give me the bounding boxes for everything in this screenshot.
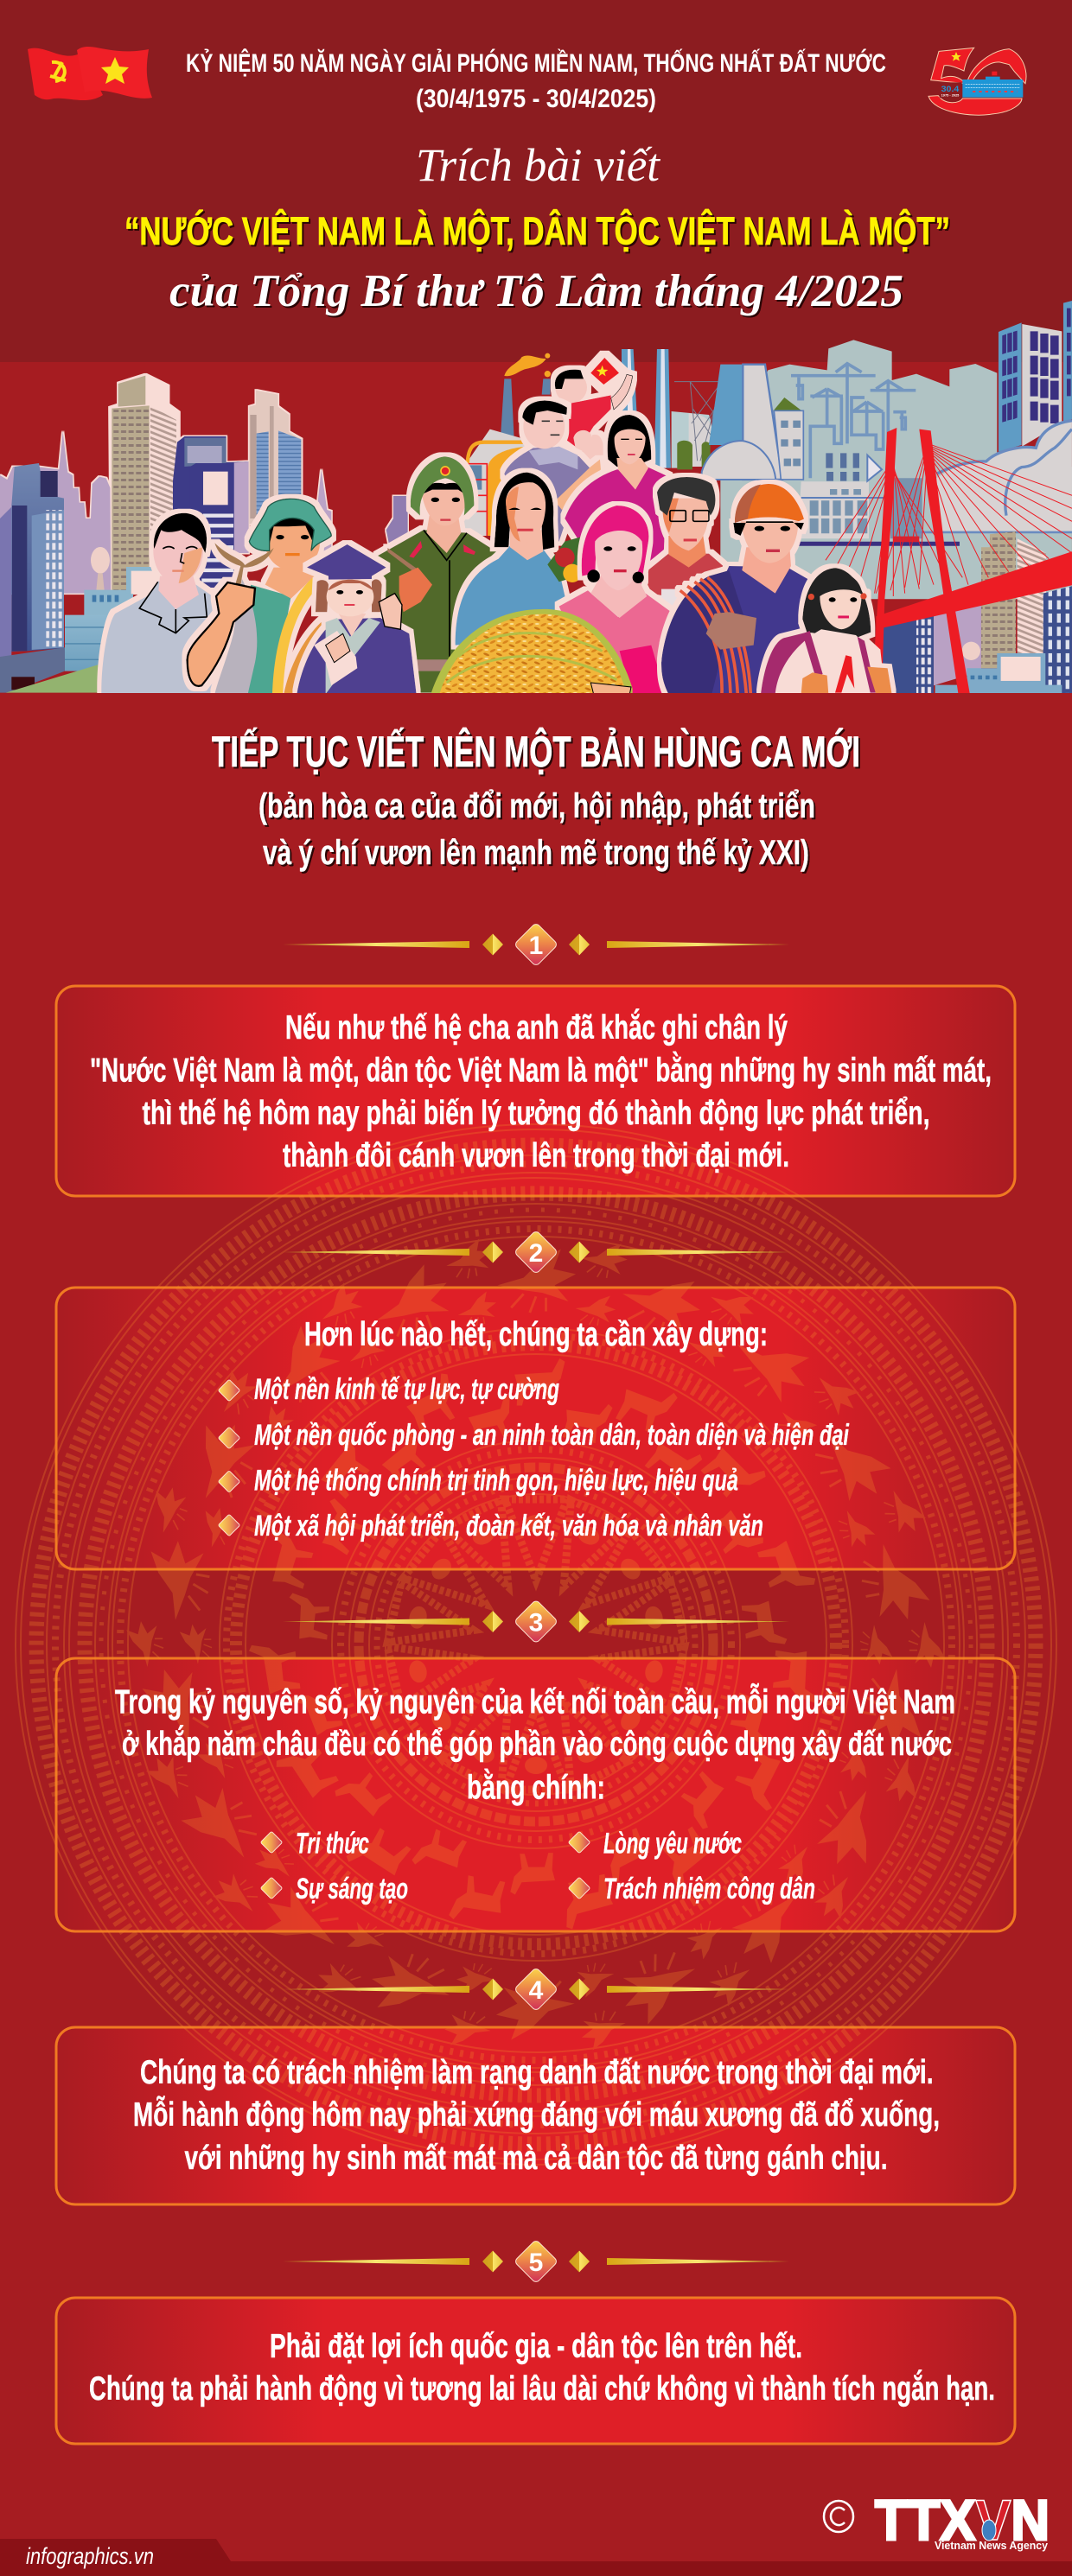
TTXVN logo: Vietnam News Agency — [935, 2539, 1049, 2552]
panel 5 background — [56, 2298, 1015, 2444]
panel 4 text — [133, 2054, 940, 2177]
panel 3 list: Trách nhiệm công dân — [603, 1873, 815, 1905]
heading: excerpt label: Trích bài viết — [416, 139, 661, 191]
panel 2 background — [56, 1288, 1015, 1569]
worker in orange helmet — [661, 484, 827, 694]
mother — [565, 415, 668, 568]
divider 1 with number: 1 — [529, 932, 543, 960]
icon: 50 years logo: 1975 - 2025 — [941, 93, 959, 97]
people: father, baby and mother — [378, 355, 668, 693]
panel 4 background — [56, 2027, 1015, 2204]
source website: infographics.vn — [26, 2543, 154, 2569]
bullet icons panel 3 — [260, 1831, 590, 1899]
panel 2 list — [254, 1373, 850, 1542]
bouquet — [547, 537, 581, 582]
schoolgirl — [761, 568, 892, 694]
panel 5 text: Phải đặt lợi ích quốc gia - dân tộc lên trên hết. — [270, 2328, 802, 2365]
footer band with source tab — [0, 2539, 1072, 2576]
father — [504, 400, 601, 542]
divider 5 with number: 5 — [529, 2248, 543, 2277]
panel 2 list: Một hệ thống chính trị tinh gọn, hiệu lực, hiệu quả — [254, 1464, 738, 1497]
panel 3 list — [296, 1827, 815, 1905]
section subtitle line 1: (bản hòa ca của đổi mới, hội nhập, phát triển — [258, 787, 815, 825]
panel 3 paragraph — [115, 1683, 955, 1806]
copyright symbol — [824, 2501, 853, 2532]
baby with flag — [555, 355, 633, 473]
man with glasses — [648, 473, 728, 606]
panel 2 list: Một nền kinh tế tự lực, tự cường — [254, 1373, 559, 1406]
divider 2 with number: 2 — [529, 1239, 543, 1268]
divider 3 with number: 3 — [529, 1609, 543, 1637]
panel 3 list: Sự sáng tạo — [296, 1873, 408, 1905]
divider 4 with number: 4 — [529, 1976, 544, 2005]
woman in blue ao dai — [456, 473, 566, 646]
divider 4 with number — [283, 1968, 789, 2011]
panel 3 background — [56, 1658, 1015, 1931]
divider 1 with number — [283, 923, 789, 966]
people: woman in blue, pink woman, man with glasses — [379, 473, 735, 694]
left city buildings — [0, 374, 331, 693]
panel 3 list: Tri thức — [296, 1827, 369, 1860]
bullet icons panel 2 — [218, 1379, 240, 1536]
panel 1 background — [56, 986, 1015, 1196]
graduate girl — [297, 544, 417, 694]
golden rice sheaf — [431, 609, 633, 694]
panel 3 paragraph: bằng chính: — [467, 1768, 605, 1806]
panel 1 text — [90, 1008, 992, 1174]
panel 3 text — [115, 1683, 955, 1905]
fisherman — [188, 499, 338, 694]
panel 1 text: Nếu như thế hệ cha anh đã khắc ghi chân lý — [285, 1008, 788, 1046]
top header band — [0, 0, 1072, 362]
panel 2 heading: Hơn lúc nào hết, chúng ta cần xây dựng: — [304, 1316, 768, 1353]
divider 2 with number — [283, 1231, 789, 1274]
icon: 50 years logo — [928, 48, 1026, 115]
right skyline and cable-stayed bridge — [702, 301, 1072, 693]
panel 2 text — [218, 1316, 850, 1542]
heading: anniversary dates: (30/4/1975 - 30/4/2025) — [416, 85, 656, 113]
woman in pink headscarf — [559, 506, 677, 694]
people: worker and schoolgirl — [661, 484, 892, 694]
panel 2 list: Một xã hội phát triển, đoàn kết, văn hóa và nhân văn — [254, 1510, 763, 1542]
section subtitle line 2: và ý chí vươn lên mạnh mẽ trong thế kỷ XXI) — [263, 834, 809, 872]
people: man and fisherman with graduate — [101, 499, 417, 694]
man in grey shirt — [101, 513, 222, 694]
divider 3 with number — [283, 1600, 789, 1644]
icon: party and national flags — [28, 47, 152, 100]
heading: author and date: của Tổng Bí thư Tô Lâm tháng 4/2025 — [169, 266, 903, 316]
panel 1 text: thành đôi cánh vươn lên trong thời đại mới. — [283, 1137, 789, 1174]
center factory and chimneys — [386, 349, 743, 544]
icon: 50 years logo: 30.4 — [941, 85, 960, 93]
panel 3 list: Lòng yêu nước — [603, 1827, 742, 1860]
divider 5 with number — [283, 2240, 789, 2283]
soldier — [378, 456, 496, 693]
illustration: people and cityscape — [0, 301, 1072, 694]
panel 5 text — [89, 2328, 995, 2407]
bronze drum background pattern — [16, 1124, 1056, 2165]
section heading — [212, 727, 860, 872]
TTXVN logo: TTXVN — [875, 2488, 1050, 2552]
